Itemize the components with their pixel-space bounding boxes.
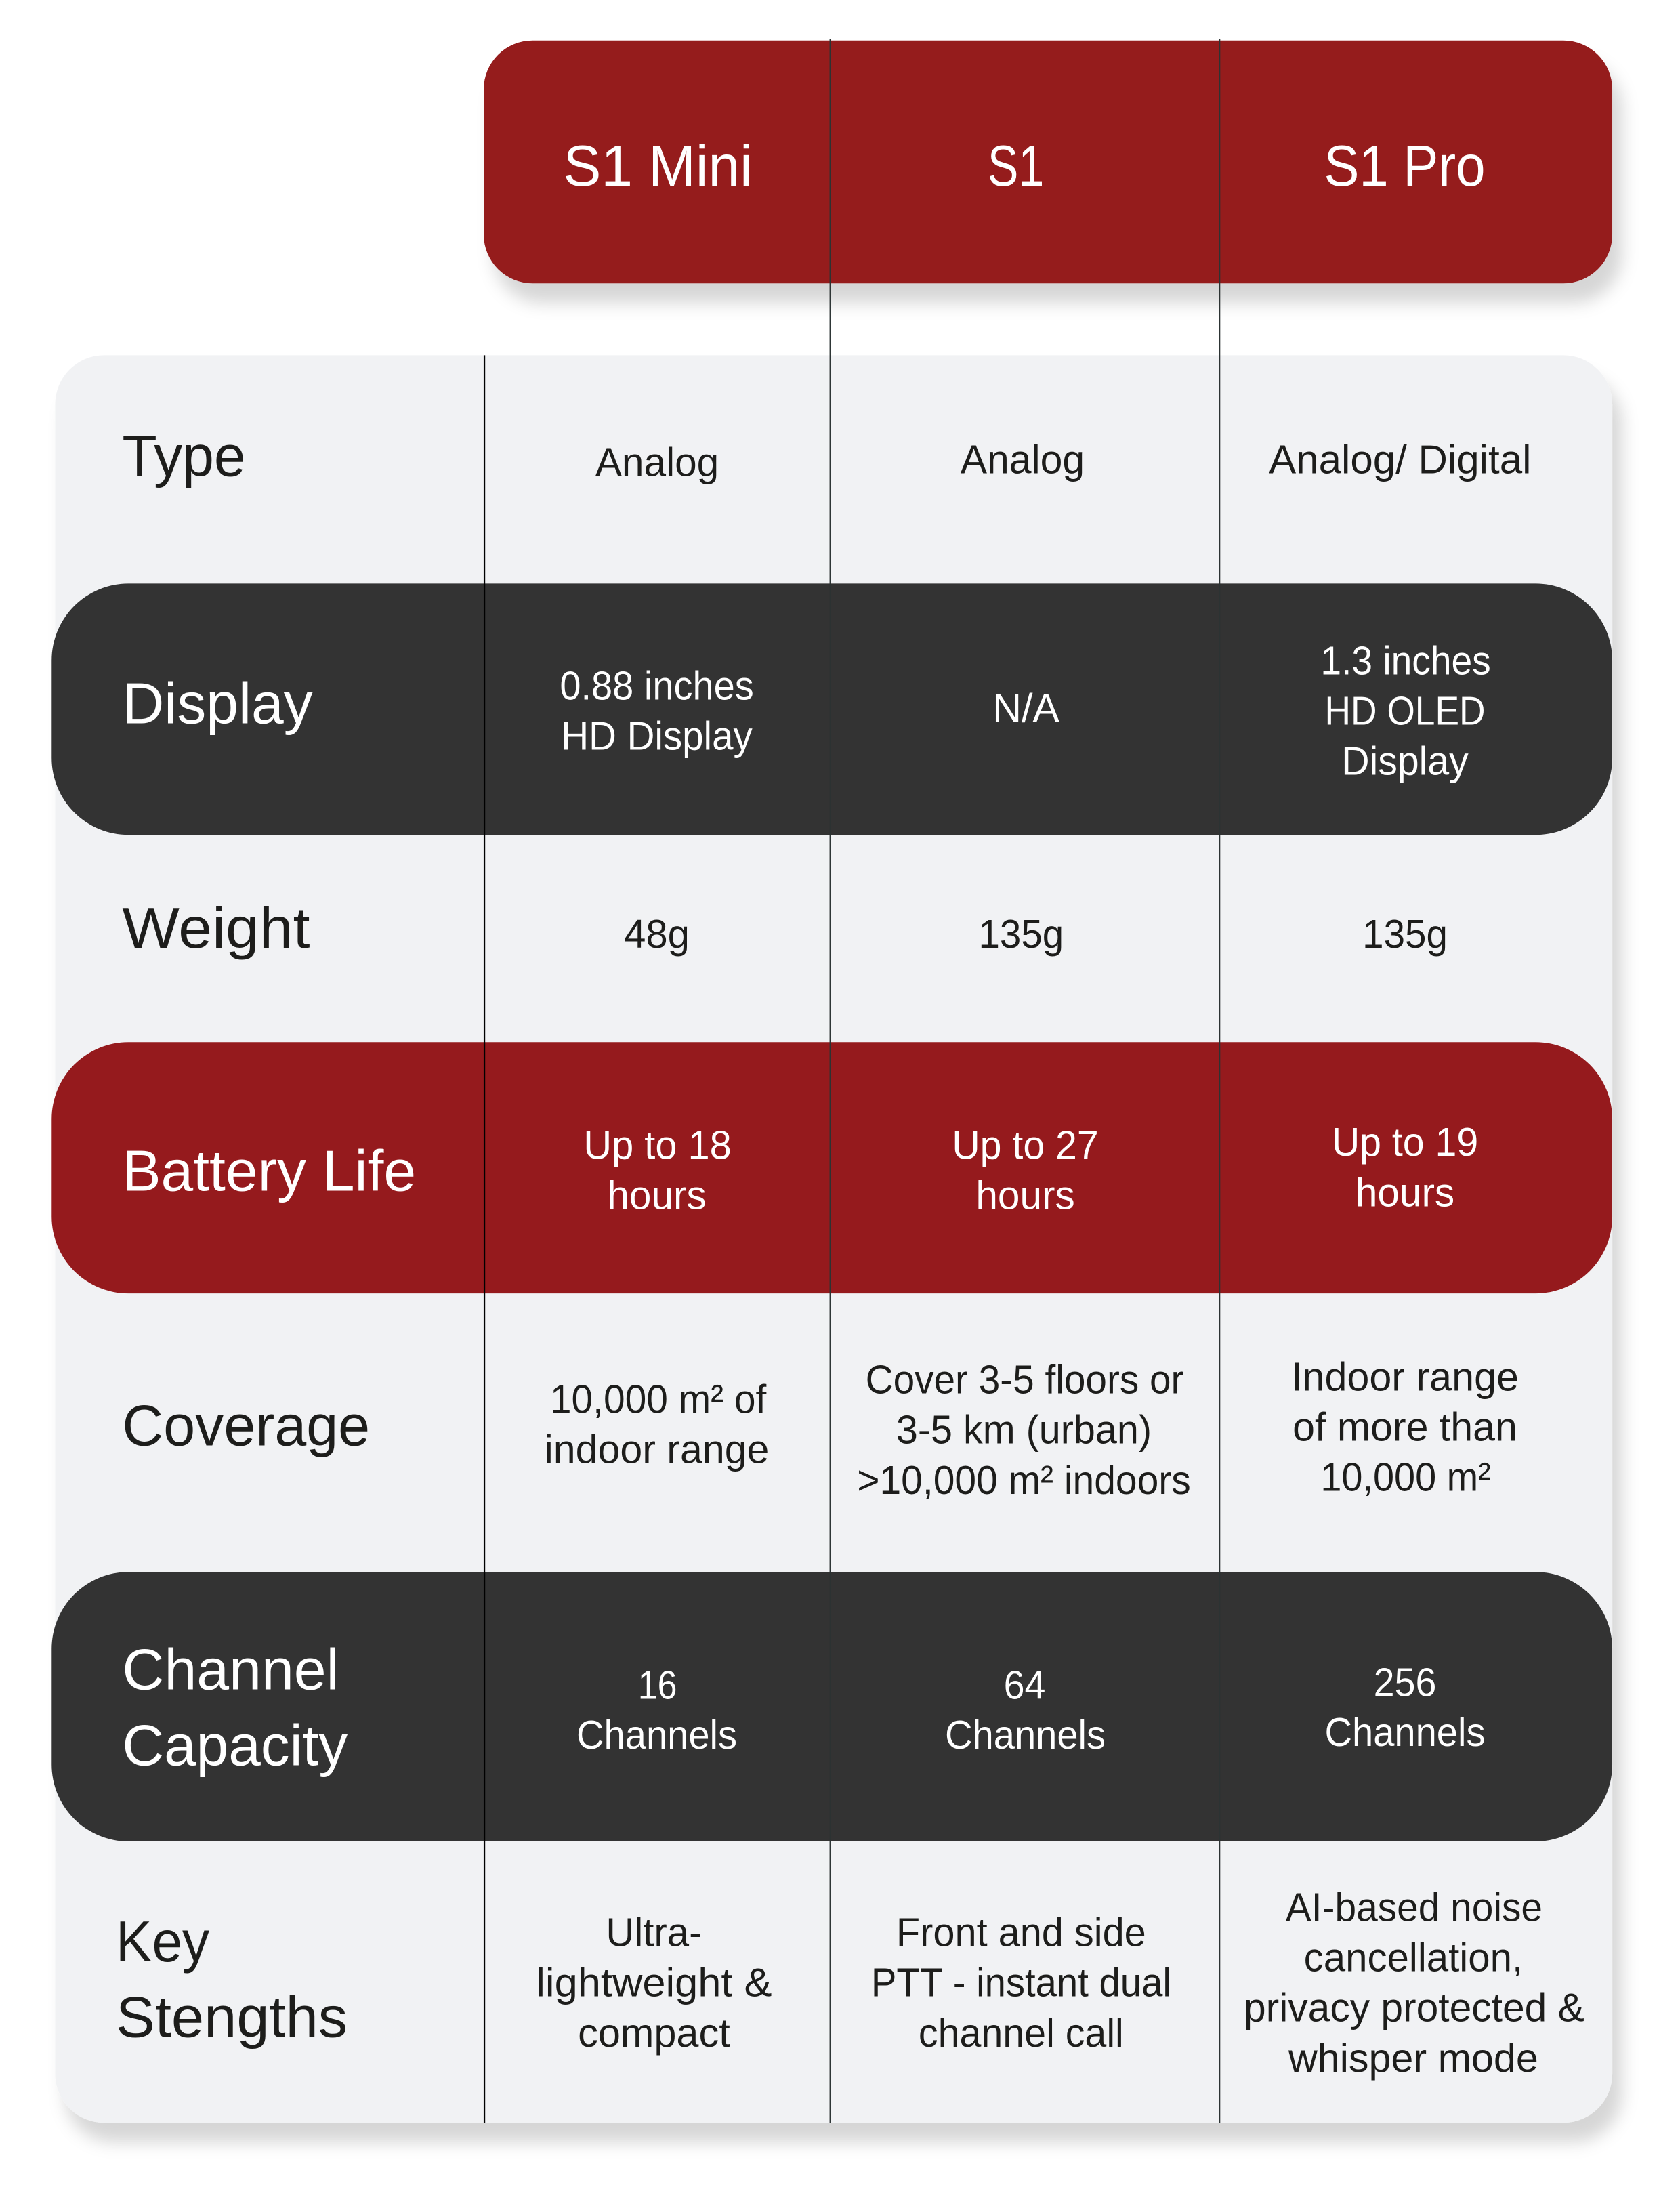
cell: S1 Mini display — [560, 663, 754, 759]
row: key strengths — [116, 1884, 1584, 2081]
cell: S1 strengths: channel call — [919, 2010, 1124, 2056]
cell: S1 strengths: PTT - instant dual — [871, 1960, 1171, 2005]
header: S1: S1 — [988, 134, 1044, 199]
label: Channel Capacity: Capacity — [122, 1714, 348, 1778]
cell: S1 Mini type: Analog — [595, 440, 719, 485]
cell: S1 Mini channels: Channels — [576, 1712, 737, 1757]
cell: S1 Mini display: 0.88 inches — [560, 663, 754, 708]
cell: S1 coverage: Cover 3-5 floors or — [866, 1356, 1183, 1402]
header: S1 Pro: S1 Pro — [1324, 134, 1486, 199]
label: Channel Capacity: Channel — [122, 1638, 339, 1702]
cell: S1 Mini strengths — [536, 1909, 772, 2056]
cell: S1 Mini strengths: compact — [578, 2010, 730, 2056]
label: Battery Life: Battery Life — [122, 1140, 416, 1204]
label: Type: Type — [122, 425, 246, 489]
cell: S1 Pro weight: 135g — [1362, 911, 1448, 957]
row: display — [122, 638, 1491, 784]
column divider: label and S1 Mini — [484, 355, 485, 2123]
band: display row — [51, 583, 1612, 835]
row: battery life — [122, 1119, 1478, 1217]
label: Weight: Weight — [122, 896, 310, 961]
cell: S1 Mini channels: 16 — [638, 1663, 677, 1708]
row: coverage — [122, 1354, 1519, 1503]
cell: S1 Pro battery: hours — [1356, 1169, 1454, 1215]
cell: S1 Mini coverage: 10,000 m² of — [550, 1376, 767, 1421]
cell: S1 Mini battery: Up to 18 — [583, 1122, 732, 1167]
cell: S1 Pro strengths — [1244, 1884, 1584, 2081]
cell: S1 Mini display: HD Display — [561, 713, 753, 759]
column headers — [563, 134, 1486, 199]
cell: S1 strengths — [871, 1909, 1171, 2056]
cell: S1 coverage: 3-5 km (urban) — [896, 1407, 1152, 1453]
cell: S1 Mini strengths: lightweight & — [536, 1960, 772, 2005]
label: Coverage: Coverage — [122, 1394, 370, 1459]
row: type — [122, 425, 1532, 489]
cell: S1 Pro display: HD OLED — [1325, 688, 1486, 733]
cell: S1 Pro channels: 256 — [1374, 1660, 1436, 1705]
label: Key Stengths — [116, 1910, 348, 2049]
cell: S1 Pro channels: Channels — [1325, 1709, 1486, 1755]
cell: S1 Pro display: 1.3 inches — [1320, 638, 1491, 683]
cell: S1 type: Analog — [961, 437, 1085, 482]
column divider: S1 and S1 Pro — [1219, 39, 1221, 2123]
cell: S1 Pro coverage — [1291, 1354, 1519, 1500]
band: battery life row — [51, 1042, 1612, 1293]
cell: S1 Pro type: Analog/ Digital — [1269, 437, 1532, 482]
label: Key Stengths: Key — [116, 1910, 209, 1974]
column divider: S1 Mini and S1 — [829, 39, 831, 2123]
header: S1 Mini: S1 Mini — [563, 134, 753, 199]
cell: S1 Pro coverage: Indoor range — [1291, 1354, 1519, 1399]
cell: S1 Pro display — [1320, 638, 1491, 784]
cell: S1 Pro display: Display — [1341, 738, 1469, 784]
cell: S1 Pro coverage: of more than — [1293, 1404, 1517, 1450]
cell: S1 channels: Channels — [945, 1712, 1106, 1757]
row: weight — [122, 896, 1448, 961]
cell: S1 Pro battery: Up to 19 — [1332, 1119, 1478, 1165]
cell: S1 Mini coverage: indoor range — [545, 1426, 769, 1472]
cell: S1 coverage: >10,000 m² indoors — [857, 1457, 1191, 1503]
cell: S1 coverage — [857, 1356, 1191, 1503]
label: Channel Capacity — [122, 1638, 348, 1778]
cell: S1 battery: hours — [975, 1172, 1075, 1217]
cell: S1 Mini coverage — [545, 1376, 769, 1472]
cell: S1 Pro strengths: privacy protected & — [1244, 1985, 1584, 2030]
cell: S1 Pro strengths: AI-based noise — [1286, 1884, 1542, 1930]
cell: S1 display: N/A — [992, 685, 1059, 730]
cell: S1 Mini battery: hours — [607, 1172, 707, 1217]
label: Display: Display — [122, 671, 313, 736]
band: channel capacity row — [51, 1572, 1612, 1841]
cell: S1 battery — [952, 1122, 1099, 1217]
row: channel capacity — [122, 1638, 1486, 1778]
cell: S1 strengths: Front and side — [896, 1909, 1146, 1955]
cell: S1 Mini channels — [576, 1663, 737, 1757]
cell: S1 Pro coverage: 10,000 m² — [1320, 1455, 1491, 1500]
cell: S1 Mini battery — [583, 1122, 732, 1217]
cell: S1 weight: 135g — [979, 911, 1064, 957]
label: Key Stengths: Stengths — [116, 1985, 348, 2049]
panel: header bar — [484, 41, 1612, 283]
cell: S1 Pro strengths: whisper mode — [1288, 2035, 1538, 2081]
cell: S1 Pro battery — [1332, 1119, 1478, 1215]
cell: S1 channels — [945, 1663, 1106, 1757]
cell: S1 channels: 64 — [1004, 1663, 1045, 1708]
cell: S1 Pro strengths: cancellation, — [1304, 1935, 1523, 1980]
panel: table background — [55, 355, 1612, 2123]
cell: S1 Mini strengths: Ultra- — [606, 1909, 702, 1955]
cell: S1 Mini weight: 48g — [624, 911, 690, 957]
cell: S1 Pro channels — [1325, 1660, 1486, 1755]
cell: S1 battery: Up to 27 — [952, 1122, 1099, 1167]
